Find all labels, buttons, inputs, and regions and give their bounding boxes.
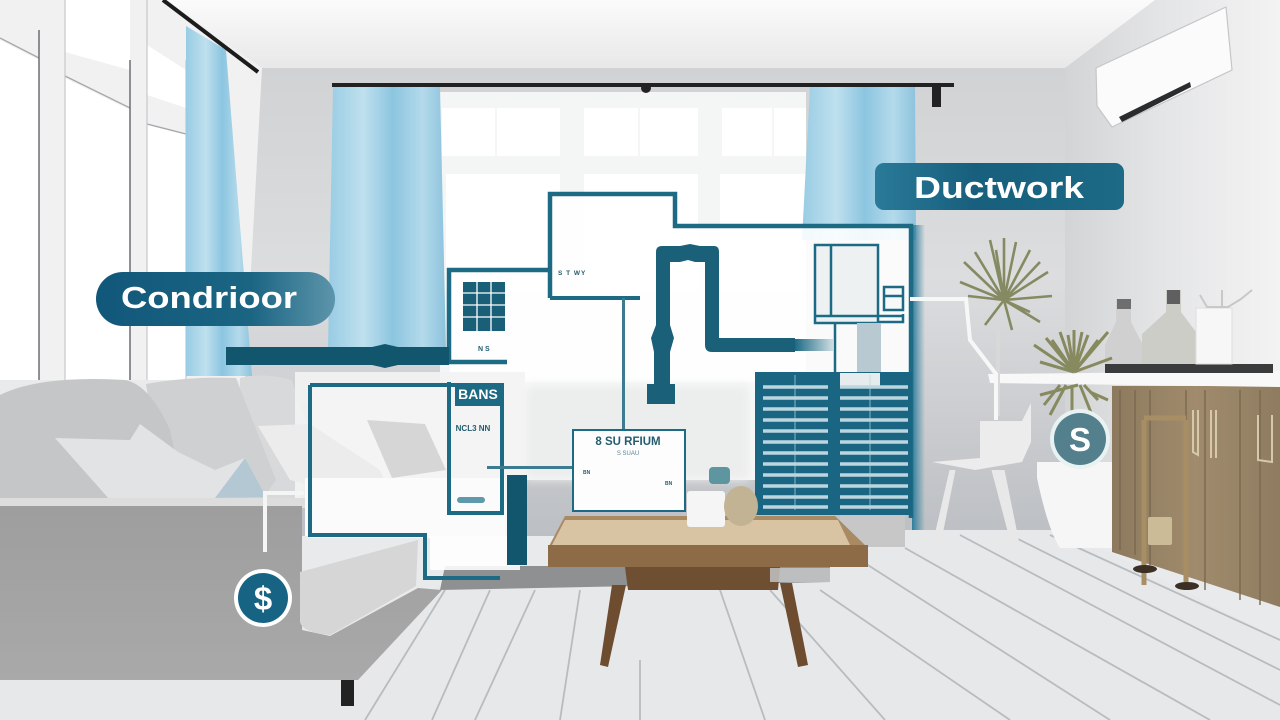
right wall [1065, 0, 1280, 530]
diagram: duct outline [449, 194, 911, 518]
diagram: centre info panel [573, 430, 685, 511]
icon: dollar badge on sofa [234, 569, 292, 627]
bottle shelf counter [988, 290, 1280, 607]
floor [0, 530, 1280, 720]
air conditioner wall unit [1096, 7, 1232, 127]
label: Condrioor: Condrioor [121, 280, 297, 315]
bottles [1105, 299, 1143, 364]
icon: S badge on planter: S [1069, 421, 1091, 458]
floor shadow under table [440, 566, 830, 590]
diagram: lower left panel: BANS [458, 386, 498, 402]
diagram: thermostat grid [463, 282, 505, 353]
centre left curtain [328, 87, 446, 350]
sofa seat top [0, 498, 305, 508]
diagram: blue shadow strip right of duct [912, 225, 925, 530]
white leader line: sofa [265, 493, 304, 552]
low wall bench behind table [840, 515, 905, 547]
diagram: centre info panel: BN [583, 470, 591, 476]
diagram: centre info panel: BN [665, 481, 673, 487]
counter top [988, 371, 1280, 387]
tray [1105, 364, 1273, 373]
label: Ductwork: Ductwork [914, 170, 1085, 205]
left window wall [0, 0, 262, 380]
diagram: centre info panel: 8 SU RFIUM [595, 436, 661, 448]
diagram: lower left panel [310, 382, 502, 578]
diagram: air handler [815, 245, 903, 375]
diagram: small caption: S T WY [558, 270, 586, 277]
diagram: vertical connector [622, 298, 625, 430]
left curtain [186, 26, 252, 376]
tabletop decor [687, 467, 758, 527]
front plant leaves [1034, 330, 1112, 420]
cabinet [1112, 386, 1280, 607]
back wall [240, 66, 1070, 536]
cabinet details [1120, 390, 1260, 605]
white jug [1196, 308, 1232, 364]
sofa front cushion [300, 540, 418, 635]
sofa back cushions [0, 372, 525, 502]
diagram: connector to centre panel [487, 466, 572, 469]
icon: S badge on planter [1050, 409, 1110, 469]
back plant leaves [960, 238, 1052, 330]
faint sofa behind diagram [525, 385, 750, 480]
label: Ductwork [875, 163, 1124, 210]
diagram: lower left panel: NCL3 NN [456, 424, 491, 433]
sofa base [0, 506, 442, 680]
back window [440, 92, 806, 382]
diagram: duct fade [795, 339, 833, 351]
diagram: thermostat grid: N S [478, 346, 490, 353]
sofa leg [341, 680, 354, 706]
left curtain rod [163, 0, 258, 72]
diagram: translucent backing panel [310, 194, 910, 570]
sofa [0, 372, 525, 706]
diagram: centre info panel: S SUAU [617, 451, 639, 457]
white chair [932, 403, 1031, 546]
diagram: louvered vent [755, 372, 912, 515]
diagram: lower thick pipe [507, 475, 527, 565]
diagram: main duct pipe [647, 244, 795, 404]
label: Condrioor [96, 272, 335, 326]
icon: dollar badge on sofa: $ [254, 580, 272, 617]
back plant stem [996, 300, 1000, 416]
throw pillows [55, 420, 446, 500]
potted plants [960, 238, 1112, 548]
white planter [1037, 462, 1112, 548]
diagram: column under air handler [857, 323, 881, 385]
ceiling [165, 0, 1155, 68]
white leader line: ductwork [910, 299, 996, 420]
diagram: lower bracket of duct [550, 296, 640, 300]
main duct left [226, 344, 449, 368]
coffee table [548, 516, 868, 667]
centre curtain rod [332, 83, 954, 107]
centre right curtain [802, 87, 916, 240]
